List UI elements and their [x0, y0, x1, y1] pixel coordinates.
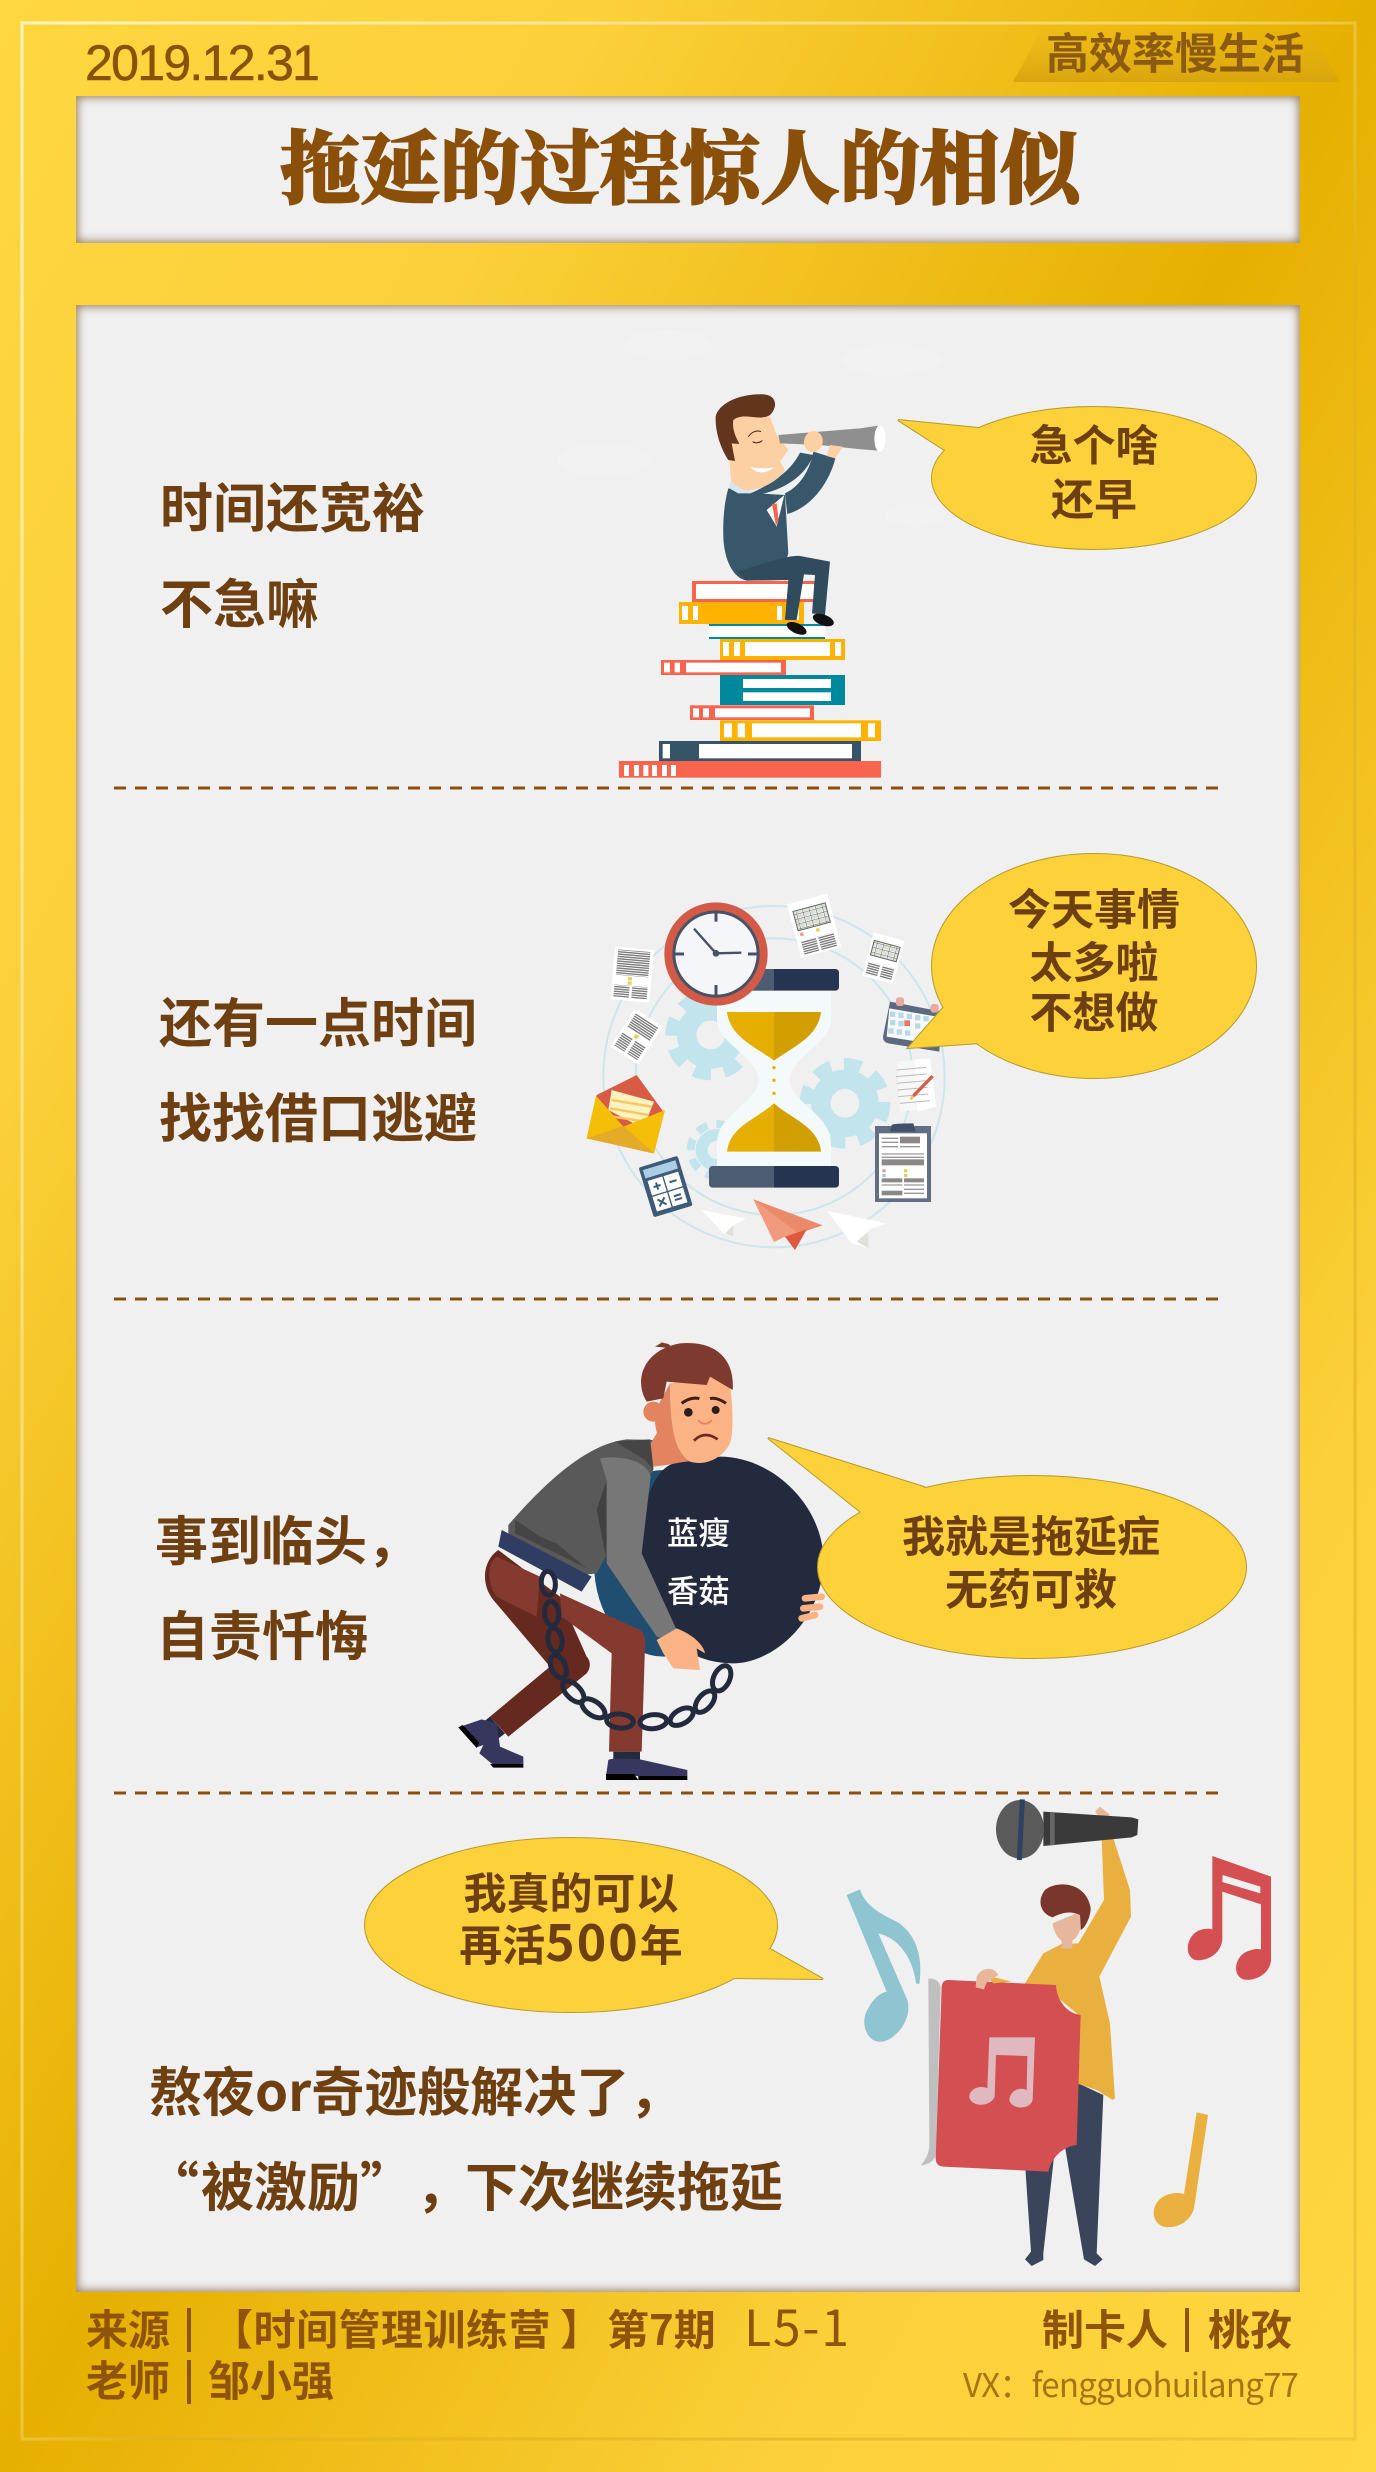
- speech bubble 4: 再活500年: [459, 1904, 683, 1976]
- speech bubble 2: 太多啦: [1030, 929, 1158, 991]
- title panel: [76, 96, 1300, 243]
- legs: [485, 1550, 590, 1737]
- yellow note: [1154, 2112, 1208, 2227]
- paper planes: [702, 1199, 887, 1250]
- section 4 text: 下次继续拖延: [465, 2146, 783, 2222]
- speech bubble 1: 急个啥: [1030, 412, 1158, 474]
- microphone: [996, 1799, 1138, 1860]
- footer left: [86, 2289, 849, 2409]
- section 4 text: 熬夜or奇迹般解决了，: [149, 2051, 682, 2127]
- hands: [657, 1597, 822, 1670]
- date: 2019.12.31: [85, 35, 318, 91]
- speech bubble 4: 我真的可以: [464, 1860, 678, 1922]
- blue note: [847, 1889, 920, 2042]
- calculator: [639, 1156, 693, 1217]
- speech bubble 1: 还早: [1051, 466, 1137, 528]
- footer left: 邹小强: [208, 2348, 334, 2409]
- main panel: [76, 305, 1300, 2292]
- body: [1025, 1838, 1131, 2100]
- footer left: 第7期: [607, 2297, 716, 2358]
- speech bubble 1: [898, 407, 1256, 549]
- ball label: 蓝瘦: [667, 1509, 730, 1554]
- speech bubble 3: [768, 1438, 1246, 1658]
- section 4 text: “: [146, 2146, 199, 2222]
- section 2 text: 找找借口逃避: [159, 1077, 477, 1153]
- head: [641, 1342, 733, 1463]
- section 1 text: 时间还宽裕: [160, 467, 425, 543]
- books stack: [619, 581, 881, 778]
- red note: [1188, 1856, 1271, 1980]
- footer right: 制卡人: [1042, 2297, 1168, 2358]
- section 3 text: 自责忏悔: [156, 1595, 368, 1671]
- speech bubble 4: [365, 1838, 823, 2012]
- section 3 text: [155, 1500, 420, 1671]
- shoes: [458, 1717, 687, 1780]
- ball label: [667, 1509, 730, 1612]
- section 1 text: [160, 467, 425, 639]
- section 1 text: 不急嘛: [160, 563, 319, 639]
- footer right: [963, 2297, 1299, 2407]
- notepad: [896, 1058, 936, 1112]
- raised hand: [1095, 1807, 1110, 1820]
- illustration: man with telescope on books: [619, 394, 886, 778]
- brand tag: 高效率慢生活: [1046, 20, 1304, 82]
- footer left: L5-1: [744, 2289, 849, 2361]
- clock: [664, 902, 768, 1006]
- torso: [508, 1439, 653, 1575]
- iron ball: [640, 1457, 823, 1663]
- sleeve: [600, 1457, 677, 1638]
- ball label: 香菇: [667, 1567, 730, 1612]
- speech bubble 2: 今天事情: [1008, 876, 1180, 938]
- hourglass: [709, 969, 839, 1188]
- section 2 text: 还有一点时间: [159, 982, 477, 1058]
- calendar: [883, 997, 942, 1052]
- speech bubble 2: 不想做: [1030, 979, 1158, 1041]
- envelope: [587, 1075, 665, 1153]
- footer left: 老师: [86, 2348, 170, 2409]
- illustration: hourglass and office items: [587, 894, 945, 1250]
- speech bubble 3: 无药可救: [945, 1556, 1117, 1618]
- section 4 text: ，: [416, 2146, 469, 2222]
- illustration: singer with songbook and notes: [847, 1799, 1271, 2266]
- head: [1040, 1884, 1091, 1949]
- man: [716, 394, 886, 637]
- gears: [671, 996, 884, 1176]
- documents: [610, 894, 905, 1065]
- speech bubble 2: [908, 854, 1256, 1078]
- footer left: 【时间管理训练营: [211, 2297, 551, 2358]
- footer right: VX：fengguohuilang77: [963, 2359, 1299, 2407]
- section 4 text: ”: [360, 2146, 413, 2222]
- section 4 text: 被激励: [201, 2146, 360, 2222]
- speech bubble 3: 我就是拖延症: [902, 1503, 1160, 1565]
- section 2 text: [159, 982, 477, 1153]
- title: 拖延的过程惊人的相似: [280, 105, 1087, 220]
- legs: [1025, 2083, 1103, 2266]
- section 3 text: 事到临头，: [155, 1500, 420, 1576]
- clipboard: [875, 1123, 931, 1202]
- book: [921, 1969, 1081, 2172]
- illustration: man carrying ball and chain: [458, 1342, 823, 1780]
- footer left: 来源: [86, 2297, 170, 2358]
- footer right: 桃孜: [1208, 2297, 1292, 2358]
- footer left: 】: [560, 2297, 602, 2358]
- neck: [651, 1433, 693, 1467]
- section 4 text: [146, 2051, 783, 2222]
- chain: [540, 1571, 735, 1730]
